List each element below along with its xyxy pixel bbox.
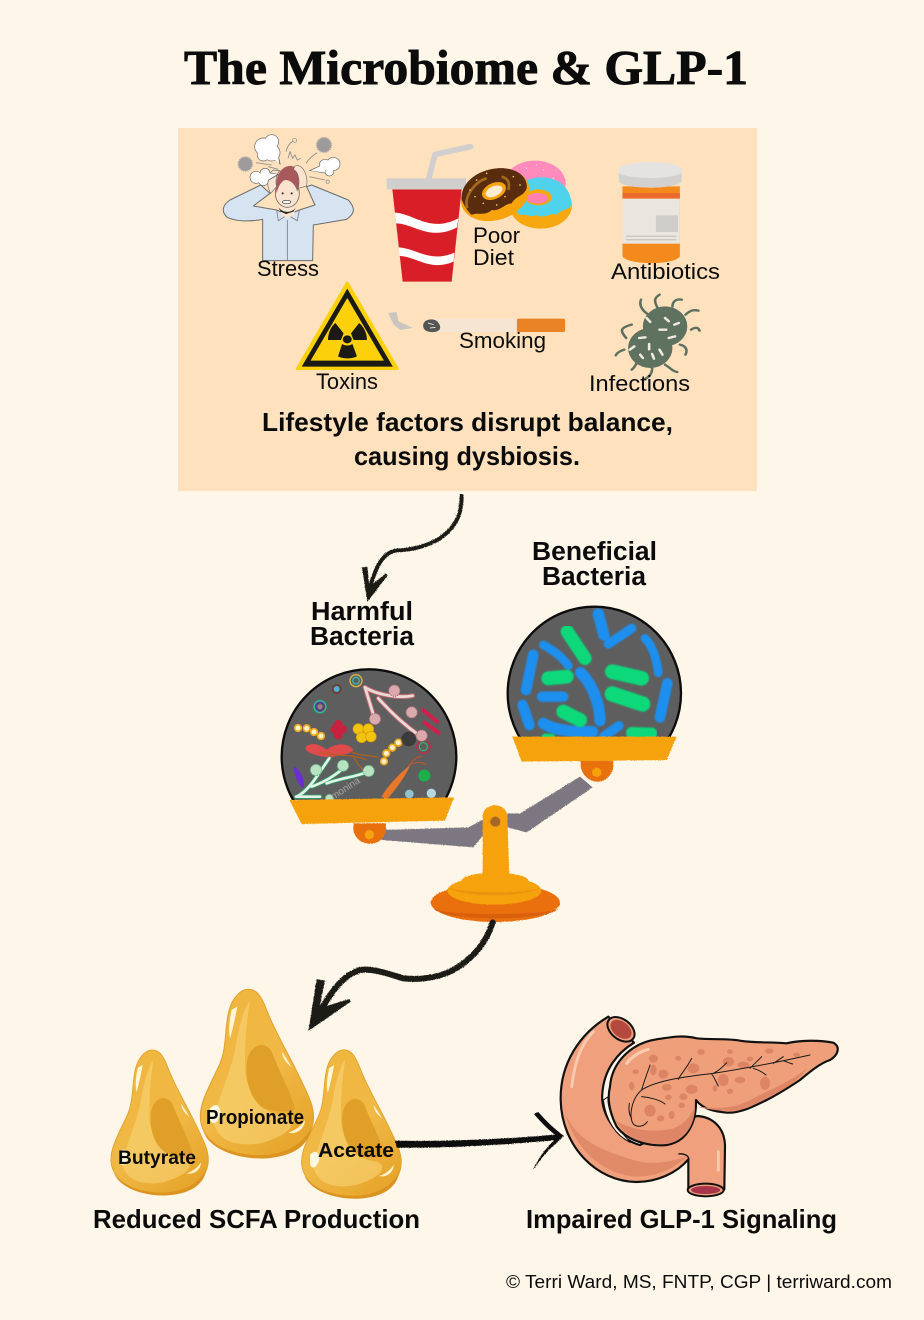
label: poor diet: Diet [473,245,514,270]
drop: propionate [200,989,314,1159]
label: beneficial bacteria [532,538,657,591]
balance scale [282,607,681,922]
caption: reduced SCFA production: Reduced SCFA Production [93,1204,420,1234]
right hinge [581,761,613,782]
icon: donuts [454,160,572,230]
footer credit: © Terri Ward, MS, FNTP, CGP | terriward.com [506,1271,892,1292]
label: beneficial bacteria: Bacteria [542,563,647,591]
panel caption: Lifestyle factors disrupt balance, [262,407,673,437]
icon: cigarette [388,312,565,332]
label: harmful bacteria: Bacteria [310,623,415,651]
label: poor diet: Poor [473,223,520,248]
label: harmful bacteria: Harmful [311,598,413,626]
label: propionate: Propionate [206,1107,304,1129]
label: smoking: Smoking [459,328,546,353]
arrow: scale to SCFA drops [308,922,493,1031]
panel caption: causing dysbiosis. [354,441,580,471]
pancreatic duct [629,1055,810,1126]
duodenum [561,1017,725,1195]
harmful bacteria circle: monina [329,775,363,803]
SCFA drops [111,989,401,1199]
arrow: panel to harmful bacteria [362,496,462,602]
arrow: SCFA to GLP-1 [395,1112,564,1169]
label: infections: Infections [589,371,690,396]
icon: pancreas [561,1012,838,1196]
pancreas body [609,1036,838,1145]
label: antibiotics: Antibiotics [611,259,720,284]
scale base [431,805,560,922]
label: harmful bacteria [310,598,415,651]
icon: soda cup [387,147,471,282]
caption: impaired GLP-1 signaling: Impaired GLP-1 Signaling [526,1204,837,1234]
label: stress: Stress [257,256,319,281]
icon: infection germ [616,295,700,379]
label: acetate: Acetate [318,1139,394,1162]
scale arm [382,777,593,847]
panel: lifestyle factors [178,128,757,491]
drop: acetate [302,1050,401,1199]
panel caption [262,407,673,471]
title: The Microbiome & GLP-1 [184,40,748,95]
icon: pill bottle [619,162,682,263]
label: toxins: Toxins [316,369,378,394]
beneficial bacteria circle [508,607,681,780]
label: beneficial bacteria: Beneficial [532,538,657,566]
label: poor diet [473,223,520,270]
harmful bacteria circle [282,669,456,844]
icon: radiation warning triangle [297,283,397,369]
drop: butyrate [111,1050,208,1196]
icon: stressed person [223,134,353,261]
label: butyrate: Butyrate [118,1147,196,1169]
left hinge [353,823,386,844]
